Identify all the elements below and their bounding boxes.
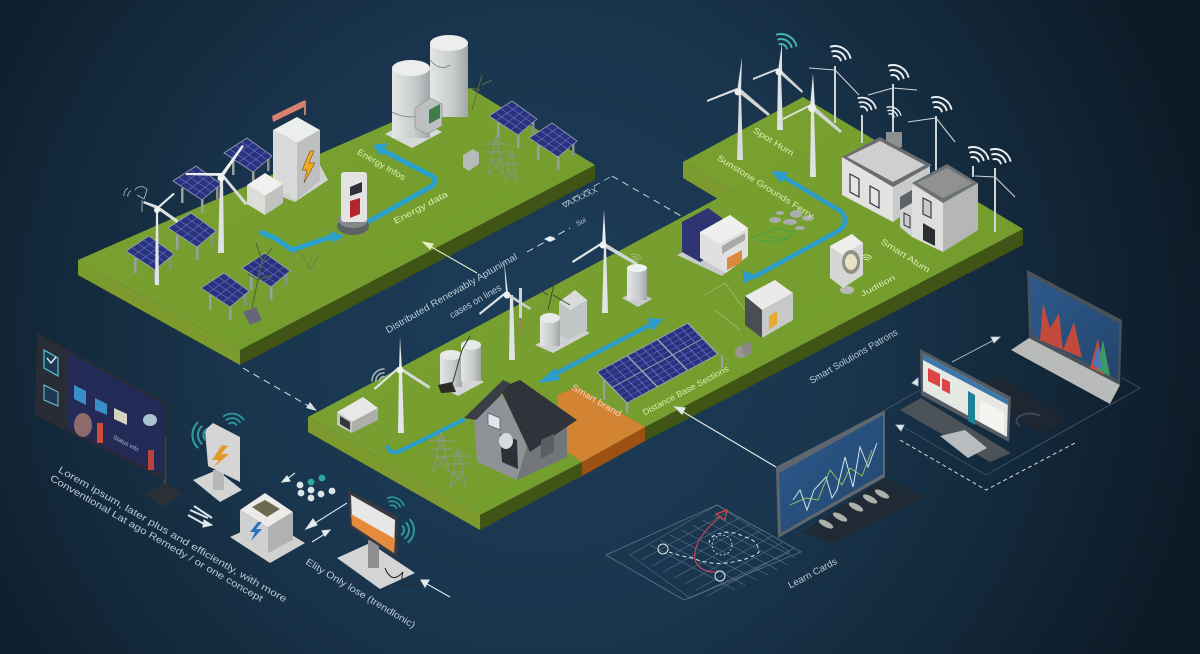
two-way blue arrow right <box>743 171 845 284</box>
wind turbine with sign <box>479 260 531 360</box>
caption: distributed energy: cases on lines <box>448 282 504 321</box>
connector arrow: monitor to platform <box>675 407 776 467</box>
monitor: waveform chart <box>776 410 925 543</box>
warning sign bar <box>272 100 306 122</box>
turbine three <box>783 73 842 177</box>
blue flow curve to house <box>388 420 463 452</box>
thin floor outline <box>885 378 1140 475</box>
wall display with app tiles: Status info <box>112 435 140 454</box>
labels on right platform: Judition <box>859 273 897 299</box>
wind turbine left platform <box>186 145 248 253</box>
device flow arrows <box>188 473 450 597</box>
labels on right platform <box>715 125 932 299</box>
small arrow laptop link <box>896 337 1000 431</box>
thin wires near cabinet <box>705 283 745 330</box>
orange smart-home zone <box>557 387 645 462</box>
dark device behind laptop <box>983 375 1067 433</box>
labels on right platform: Sunstone Grounds Ferry <box>715 153 816 221</box>
solar panels left group <box>126 101 577 320</box>
wall display with app tiles <box>35 333 183 507</box>
panel: control dashboards <box>606 270 1140 600</box>
panel: left energy platform <box>78 35 595 365</box>
house with meter <box>464 380 577 480</box>
wind turbine centre <box>374 337 430 433</box>
wind turbine left platform <box>143 193 178 285</box>
caption: link code: VAXXXXX <box>561 185 600 210</box>
laptop: centre dashboard <box>900 349 1011 462</box>
label: distance base: Distance Base Sections <box>641 363 730 417</box>
caption: two-line description <box>48 465 288 605</box>
caption: link short: Sol <box>575 217 588 228</box>
power cabinet lower <box>745 280 793 338</box>
battery unit with blue bolt <box>230 493 305 563</box>
inverter box <box>337 397 378 433</box>
caption: device note: Elity Only lose (trendlonic) <box>303 557 417 631</box>
labels on right platform: Smart Atum <box>879 236 932 275</box>
keypad buttons <box>818 488 890 530</box>
wifi at turbine <box>371 366 386 384</box>
dashed link arrow head <box>306 402 317 411</box>
connector: distributed label arrow <box>423 242 477 273</box>
twin tanks with plant <box>438 336 484 396</box>
cylinder unit <box>622 254 652 307</box>
charging kiosk <box>337 172 369 235</box>
connector: dashed links <box>243 176 683 408</box>
wind turbine centre right <box>572 210 638 313</box>
transformer unit <box>535 280 590 353</box>
antenna scribble <box>124 187 147 212</box>
turbine two <box>753 43 803 130</box>
flow arrow: kiosk to tanks <box>368 143 435 222</box>
navy and grey cabinets <box>677 208 748 276</box>
solar array: six panels <box>597 323 722 413</box>
dashed links around laptops <box>900 440 1075 490</box>
labels on right platform: Spot Hum <box>751 125 796 158</box>
storage tanks <box>385 35 468 148</box>
wind turbines right platform <box>707 43 842 177</box>
junction box <box>463 149 479 171</box>
caption: two-line description: Conventional Lat ago Remedy / or one concept <box>48 473 265 605</box>
battery cabinet with bolt <box>270 117 328 202</box>
caption: smart solutions: Smart Solutions Patrons <box>808 327 900 387</box>
rocks and green cable <box>752 210 814 243</box>
plant <box>243 243 272 325</box>
flow arrow: lower <box>260 231 344 250</box>
small storage unit <box>247 173 283 215</box>
panel: centre and right L-shaped platform <box>308 34 1023 530</box>
two-way flow arrow centre <box>538 318 663 383</box>
label: energy data: Energy data <box>392 189 450 226</box>
signal sign with orange bolt <box>187 411 245 502</box>
caption: two-line description: Lorem ipsum, later plus and efficiently, with more <box>56 465 288 605</box>
smart meter <box>830 234 872 294</box>
caption: learn cards: Learn Cards <box>786 556 839 591</box>
pylons <box>483 135 522 182</box>
caption: distributed energy: Distributed Renewably Aptunimal <box>384 252 519 336</box>
laptop: top right with peaks chart <box>1011 270 1122 404</box>
label: energy intro: Energy Infos <box>356 147 407 182</box>
label: orange zone: Smart brand <box>570 382 623 419</box>
plant by arrow <box>290 250 320 270</box>
panel: left devices <box>35 333 450 631</box>
smart building <box>842 132 978 252</box>
grey rocks <box>735 342 752 358</box>
turbine one <box>707 57 770 160</box>
link diamond <box>544 236 556 242</box>
power pylons <box>428 432 471 487</box>
network dots <box>297 475 335 501</box>
communication masts with wifi <box>776 34 1015 232</box>
kiosk monitor <box>337 490 418 589</box>
sprig at tanks <box>470 75 492 110</box>
grid map with route <box>606 505 801 600</box>
